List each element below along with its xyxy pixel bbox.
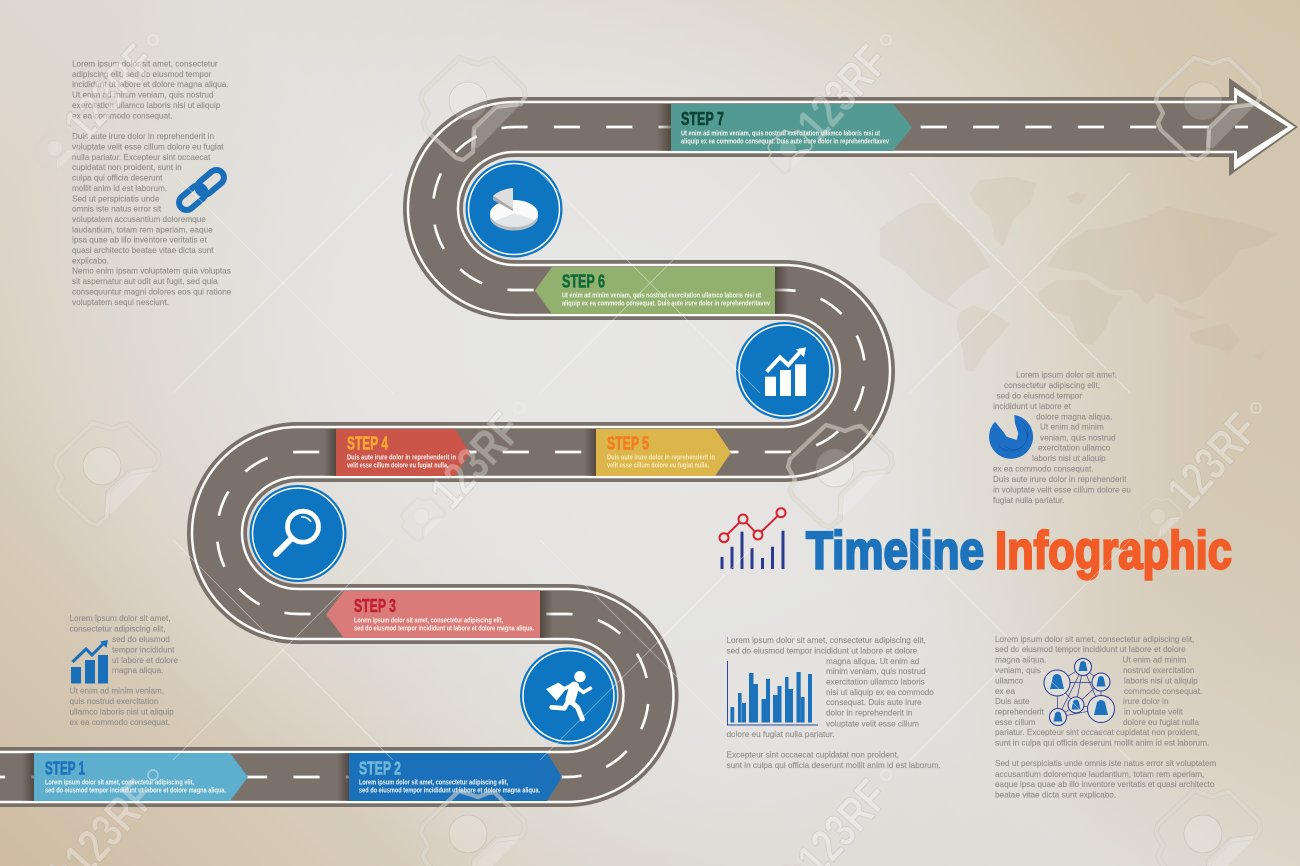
text block: top left: Sed ut perspiciatis unde [72, 194, 160, 203]
text block: lower right: accusantium doloremque laudantium, totam rem aperiam, [995, 770, 1204, 779]
text block: lower right: ex ea [995, 687, 1015, 696]
text block: middle bottom: magna aliqua. Ut enim ad [826, 657, 920, 666]
text block: lower left: tempor incididunt [112, 646, 175, 654]
icon: growth chart badge [736, 322, 833, 419]
text block: lower right: eaque ipsa quae ab illo inventore veritatis et quasi architecto [995, 780, 1215, 789]
text block: lower right: ullamco [995, 676, 1024, 686]
text block: lower right: sunt in culpa qui officia deserunt mollit anim id est laborum. [995, 738, 1209, 748]
text block: lower right: Ut enim ad minim [1122, 656, 1186, 664]
text block: middle bottom: sunt in culpa qui officia deserunt mollit anim id est laborum. [726, 761, 941, 770]
step 2 banner [337, 753, 562, 801]
text block: middle bottom: minim veniam, quis nostrud [826, 667, 926, 676]
title icon: line and bars [720, 508, 786, 569]
step 7 banner: Ut enim ad minim veniam, quis nostrud exercitation ullamco laboris nisi ut [681, 129, 880, 138]
text block: top left: ipsa quae ab illo inventore veritatis et [72, 236, 207, 245]
text block: lower left: Lorem ipsum dolor sit amet, [70, 614, 171, 623]
text block: right middle: fugiat nulla pariatur. [993, 496, 1064, 505]
text block: lower right: Lorem ipsum dolor sit amet, consectetur adipiscing elit, [995, 635, 1194, 644]
text block: lower right: veniam, quis [995, 666, 1041, 675]
text block: middle bottom: consequat. Duis aute irure [826, 698, 922, 707]
text block: top left: sit aspernatur aut odit aut fugit, sed quia [72, 277, 218, 286]
text block: lower right: sed do eiusmod tempor incididunt ut labore et dolore [995, 645, 1186, 654]
text block: top left: Duis aute irure dolor in reprehenderit in [72, 132, 214, 141]
text block: middle bottom: sed do eiusmod tempor incididunt ut labore et dolore [726, 646, 918, 656]
text block: lower left: magna aliqua. [112, 666, 163, 675]
text block: lower right: Sed ut perspiciatis unde omnis iste natus error sit voluptatem [995, 759, 1216, 768]
text block: middle bottom: dolore eu fugiat nulla pariatur. [726, 730, 834, 739]
text block: middle bottom: Lorem ipsum dolor sit amet, consectetur adipiscing elit, [726, 636, 926, 645]
icon: magnifier badge [250, 485, 346, 582]
icon: people network [1044, 658, 1114, 726]
step 5 banner [584, 429, 731, 476]
step 5 banner: STEP 5 [607, 432, 649, 454]
text block: lower right: laboris nisi ut aliquip [1124, 676, 1198, 686]
text block: top left: quasi architecto beatae vitae dicta sunt [72, 246, 214, 255]
step 4 banner: Duis aute irure dolor in reprehenderit in [347, 453, 456, 462]
text block: right middle: incididunt ut labore et [993, 402, 1072, 411]
text block: lower left: quis nostrud exercitation [70, 697, 159, 706]
bar chart [728, 661, 818, 725]
text block: right middle: sed do eiusmod tempor [996, 392, 1082, 400]
step 3 banner: Lorem ipsum dolor sit amet, consectetur adipiscing elit, [354, 616, 503, 625]
title: Infographic [995, 522, 1232, 580]
title [720, 508, 1232, 580]
text block: top left: Lorem ipsum dolor sit amet, consectetur [72, 60, 218, 68]
step 1 banner: sed do eiusmod tempor incididunt ut labore et dolore magna aliqua. [45, 786, 226, 795]
text block: top left: explicabo. [72, 256, 109, 265]
text block: top left: voluptate velit esse cillum dolore eu fugiat [72, 142, 224, 152]
text block: lower right: beatae vitae dicta sunt explicabo. [995, 790, 1116, 800]
icon: pie chart badge [466, 160, 562, 258]
text block: lower left: ex ea commodo consequat. [70, 718, 170, 727]
text block: top left: laudantium, totam rem aperiam, eaque [72, 225, 213, 234]
text block: right middle: Duis aute irure dolor in reprehenderit [993, 475, 1127, 484]
world map background [880, 177, 1280, 372]
text block: middle bottom: nisi ut aliquip ex ea commodo [826, 688, 934, 697]
text block: top left: ex ea commodo consequat. [72, 112, 173, 120]
step 6 banner [535, 267, 789, 314]
step 2 banner: STEP 2 [359, 757, 401, 778]
step 4 banner: velit esse cillum dolore eu fugiat nulla. [347, 461, 449, 470]
step 3 banner: STEP 3 [354, 595, 396, 616]
text block: right middle: exercitation ullamco [1038, 444, 1111, 452]
text block: lower left: ullamco laboris nisi ut aliquip [70, 707, 174, 716]
step 7 banner: STEP 7 [681, 108, 724, 129]
step 5 banner: velit esse cillum dolore eu fugiat nulla. [607, 461, 709, 470]
step 1 banner: Lorem ipsum dolor sit amet, consectetur adipiscing elit, [45, 778, 194, 787]
icon: radial donut [989, 415, 1033, 459]
text block: right middle: in voluptate velit esse cillum dolore eu [993, 486, 1131, 494]
step 1 banner: STEP 1 [45, 757, 85, 778]
text block: right middle: Ut enim ad minim [1040, 422, 1104, 432]
text block: lower left: Ut enim ad minim veniam, [70, 686, 164, 696]
text block: top left: adipiscing elit, sed do eiusmod tempor [72, 70, 212, 79]
icon: chain link [176, 167, 227, 213]
text block: top left: mollit anim id est laborum. [72, 184, 167, 193]
text block: middle bottom: Excepteur sint occaecat cupidatat non proident, [726, 750, 899, 760]
step 2 banner: sed do eiusmod tempor incididunt ut labore et dolore magna aliqua. [359, 786, 540, 795]
icon: small growth chart [71, 640, 108, 684]
text block: top left: consequuntur magni dolores eos qui ratione [72, 287, 232, 296]
text block: lower right: commodo consequat. [1124, 687, 1202, 696]
text block: lower left: consectetur adipiscing elit, [70, 624, 166, 634]
text block: lower right: Duis aute [995, 697, 1030, 706]
text block: top left: culpa qui officia deserunt [72, 174, 163, 183]
step 3 banner [326, 591, 553, 638]
step 7 banner: aliquip ex ea commodo consequat. Duis aute irure dolor in reprehenderitavev [681, 137, 890, 146]
step 4 banner [324, 429, 470, 476]
text block: right middle: Lorem ipsum dolor sit amet, [1016, 370, 1117, 380]
watermark cross lines [173, 173, 1130, 760]
step 7 banner [657, 104, 912, 151]
text block: top left: incididunt ut labore et dolore magna aliqua. [72, 80, 229, 89]
text block: top left: nulla pariatur. Excepteur sint occaecat [72, 153, 211, 162]
text block: lower right: magna aliqua. [995, 656, 1046, 664]
step 6 banner: aliquip ex ea commodo consequat. Duis aute irure dolor in reprehenderitavev [562, 299, 771, 308]
text block: lower right: nostrud exercitation [1123, 666, 1195, 675]
step 6 banner: Ut enim ad minim veniam, quis nostrud exercitation ullamco laboris nisi ut [562, 291, 761, 300]
step 6 banner: STEP 6 [562, 270, 605, 291]
step 1 banner [22, 753, 248, 801]
text block: lower right: esse cillum [995, 718, 1036, 727]
step 3 banner: sed do eiusmod tempor incididunt ut labore et dolore magna aliqua. [354, 624, 534, 633]
text block: right middle: consectetur adipiscing elit, [1004, 381, 1100, 390]
text block: top left: Ut enim ad minim veniam, quis nostrud [72, 90, 214, 100]
text block: top left: voluptatem sequi nesciunt. [72, 298, 169, 307]
text block: lower right: irure dolor in [1123, 697, 1169, 706]
text block: lower right: pariatur. Excepteur sint occaecat cupidatat non proident, [995, 728, 1199, 737]
text block: right middle: laboris nisi ut aliquip [1032, 454, 1106, 463]
text block: right middle: dolore magna aliqua. [1036, 412, 1112, 422]
text block: top left: voluptatem accusantium doloremque [72, 215, 206, 224]
title: Timeline [806, 522, 984, 580]
text block: top left: omnis iste natus error sit [72, 205, 162, 214]
text block: middle bottom: exercitation ullamco laboris [826, 678, 925, 686]
step 4 banner: STEP 4 [347, 432, 388, 454]
text block: lower left: ut labore et dolore [112, 656, 178, 665]
text block: lower right: in voluptate velit [1124, 708, 1183, 716]
text block: top left: cupidatat non proident, sunt in [72, 163, 182, 172]
text block: middle bottom: dolor in reprehenderit in [826, 709, 913, 718]
icon: runner badge [520, 648, 617, 744]
text block: middle bottom: voluptate velit esse cillum [826, 719, 919, 728]
text block: lower right: reprehenderit [995, 708, 1044, 716]
text block: top left: exercitation ullamco laboris nisi ut aliquip [72, 101, 221, 110]
text block: top left: Nemo enim ipsam voluptatem quia voluptas [72, 267, 231, 276]
text block: lower left: sed do eiusmod [112, 635, 170, 644]
step 5 banner: Duis aute irure dolor in reprehenderit in [607, 453, 715, 462]
step 2 banner: Lorem ipsum dolor sit amet, consectetur adipiscing elit, [359, 778, 508, 787]
text block: right middle: veniam, quis nostrud [1040, 434, 1116, 442]
text block: right middle: ex ea commodo consequat. [993, 464, 1094, 474]
text block: lower right: dolore eu fugiat nulla [1123, 718, 1199, 727]
